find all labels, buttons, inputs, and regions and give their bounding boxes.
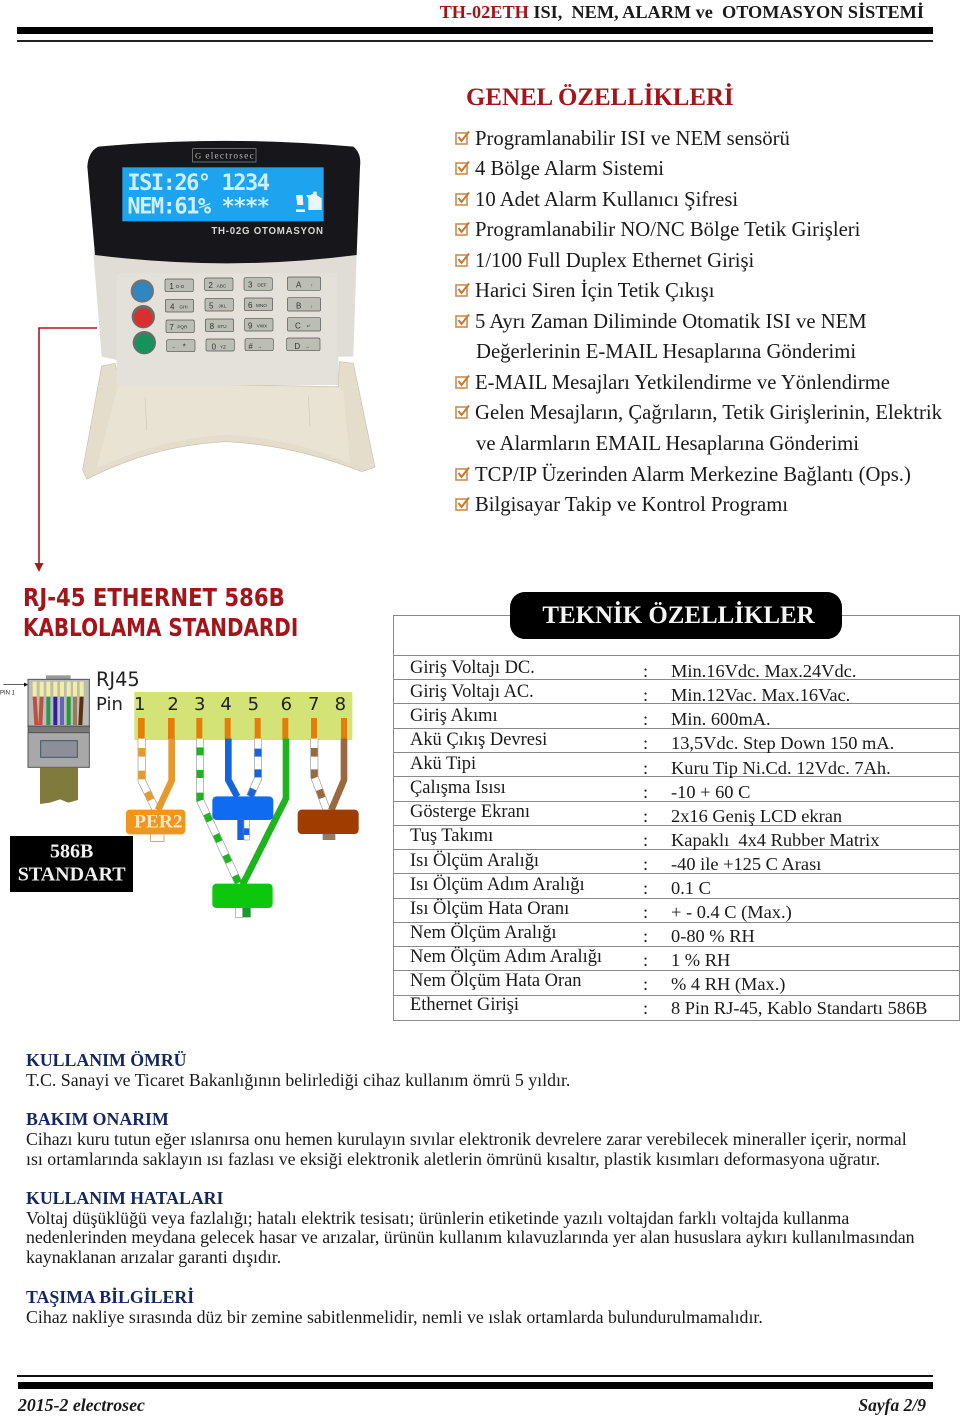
wiring diagram (0, 668, 359, 918)
rj45 pin labels: 7 (308, 694, 319, 715)
feature 7 (455, 311, 867, 363)
spec table text: Giriş Voltajı DC. (410, 657, 535, 677)
rj45 pin labels: 3 (194, 694, 205, 715)
table row lines (394, 655, 959, 996)
section: taşıma bilgileri: TAŞIMA BİLGİLERİ (26, 1287, 194, 1307)
spec table text: 1 % RH (671, 950, 730, 970)
spec table text: 0.1 C (671, 878, 711, 898)
feature 8: E-MAIL Mesajları Yetkilendirme ve Yönlendirme (475, 372, 890, 394)
keypad keys (165, 277, 321, 352)
feature 3: 10 Adet Alarm Kullanıcı Şifresi (475, 189, 738, 211)
spec table text: Isı Ölçüm Adım Aralığı (410, 874, 585, 894)
rj45 pin labels (96, 668, 346, 715)
rj45 pin labels: 2 (167, 694, 179, 715)
feature 2: 4 Bölge Alarm Sistemi (475, 158, 664, 180)
keypad keys: DEF (257, 283, 267, 288)
keypad keys: 6 (248, 301, 253, 310)
header title: TH-02ETH ISI, NEM, ALARM ve OTOMASYON SİSTEMİ (440, 2, 924, 22)
keypad device photo (82, 140, 376, 480)
orange pair connector: PER2 (134, 812, 182, 833)
blue pair (228, 739, 258, 840)
spec table text: : (643, 685, 648, 705)
keypad keys: 2 (208, 281, 213, 290)
spec table text: 2x16 Geniş LCD ekran (671, 806, 842, 826)
spec table text: Giriş Akımı (410, 705, 498, 725)
feature 11: Bilgisayar Takip ve Kontrol Programı (475, 494, 788, 516)
features heading: GENEL ÖZELLİKLERİ (466, 84, 734, 111)
orange pair connector (126, 810, 185, 841)
spec table text: % 4 RH (Max.) (671, 974, 785, 994)
spec table text: Min.12Vac. Max.16Vac. (671, 685, 850, 705)
spec table text: Nem Ölçüm Hata Oran (410, 970, 582, 990)
spec table text: Ethernet Girişi (410, 994, 519, 1014)
section: bakım onarım (26, 1109, 907, 1169)
keypad keys: PQR (177, 325, 188, 330)
rj-45 heading: KABLOLAMA STANDARDI (23, 612, 298, 642)
section: kullanım hataları: nedenlerinden meydana gelecek hasar ve arızalar, ürünün kullanım kılavuzlarında yer alan hususlara aykırı kullanılmasından (26, 1227, 915, 1247)
spec table text: : (643, 998, 648, 1018)
keypad keys: ↵ (307, 323, 311, 328)
section: bakım onarım: Cihazı kuru tutun eğer ıslanırsa onu hemen kurulayın sıvılar elektronik devrelere zarar verebilecek mineraller içerir, normal (26, 1129, 907, 1149)
lcd display (122, 167, 324, 221)
section: kullanım hataları (26, 1188, 915, 1267)
spec table text (410, 657, 927, 1018)
spec table text: + - 0.4 C (Max.) (671, 902, 792, 922)
feature 10: TCP/IP Üzerinden Alarm Merkezine Bağlantı (Ops.) (475, 464, 911, 486)
keypad keys: O-D (176, 284, 185, 289)
brown pair (314, 739, 344, 840)
section: kullanım hataları: KULLANIM HATALARI (26, 1188, 223, 1208)
keypad keys: # (248, 342, 253, 351)
header rule thin (17, 40, 933, 42)
spec table text: : (643, 974, 648, 994)
keypad keys: 4 (170, 302, 175, 311)
orange pair (142, 739, 172, 810)
feature 6: Harici Siren İçin Tetik Çıkışı (475, 280, 714, 302)
section: kullanım ömrü (26, 1050, 570, 1090)
rj45 pin labels: 8 (335, 694, 346, 715)
blue pair connector (212, 796, 273, 820)
spec table text: Min.16Vdc. Max.24Vdc. (671, 661, 856, 681)
keypad keys: * (183, 342, 186, 351)
feature 7: 5 Ayrı Zaman Diliminde Otomatik ISI ve NEM (475, 311, 867, 333)
rj45 pin labels: RJ45 (96, 668, 140, 691)
keypad keys: STU (217, 324, 227, 329)
spec table text: : (643, 950, 648, 970)
pin band (134, 692, 352, 740)
spec table text: Çalışma Isısı (410, 777, 506, 797)
brand label: G (195, 151, 201, 161)
spec table text: : (643, 854, 648, 874)
header rule thick (17, 27, 933, 34)
keypad keys: YZ (220, 344, 226, 349)
feature 5: 1/100 Full Duplex Ethernet Girişi (475, 250, 754, 272)
rj45 plug (0, 675, 89, 804)
spec table text: 0-80 % RH (671, 926, 755, 946)
keypad keys: → (305, 344, 310, 349)
keypad keys: 8 (210, 322, 215, 331)
section: taşıma bilgileri (26, 1287, 763, 1327)
keypad keys: 9 (248, 322, 253, 331)
rj-45 heading (23, 583, 298, 642)
technical heading pill (510, 592, 842, 639)
section: kullanım hataları: kaynaklanan arızalar garanti dışıdır. (26, 1247, 281, 1267)
keypad keys: JKL (218, 304, 227, 309)
keypad keys: → (257, 344, 262, 349)
brand label (193, 149, 256, 162)
green pair (200, 739, 286, 917)
keypad keys: B (296, 301, 301, 310)
keypad keys: C (295, 321, 301, 330)
technical specifications panel (393, 592, 960, 1021)
spec table text: Akü Çıkış Devresi (410, 729, 547, 749)
keypad keys: 0 (212, 342, 217, 351)
table frame (393, 615, 960, 1021)
feature 9: Gelen Mesajların, Çağrıların, Tetik Girişlerinin, Elektrik (475, 402, 942, 424)
keypad keys: MNO (256, 303, 267, 308)
footer page number: Sayfa 2/9 (858, 1395, 926, 1415)
keypad keys: 7 (169, 323, 174, 332)
spec table text: Min. 600mA. (671, 709, 771, 729)
feature 1: Programlanabilir ISI ve NEM sensörü (475, 128, 790, 150)
spec table text: Kapaklı 4x4 Rubber Matrix (671, 830, 879, 850)
rj45 pin labels: 6 (281, 694, 292, 715)
black bezel (87, 141, 360, 263)
footer rule thick (18, 1382, 933, 1389)
keypad keys: 3 (248, 281, 253, 290)
spec table text: : (643, 806, 648, 826)
spec table text: : (643, 661, 648, 681)
586b standard label: STANDART (18, 863, 126, 885)
spec table text: -10 + 60 C (671, 782, 750, 802)
keypad lid (83, 362, 375, 479)
spec table text: : (643, 709, 648, 729)
section: bakım onarım: ısı ortamlarında saklayın ısı fazlası ve eksiği elektronik aletlerin ömrünü kısaltır, plastik kısımları deformasyona uğratır. (26, 1149, 880, 1169)
section: bakım onarım: BAKIM ONARIM (26, 1109, 169, 1129)
feature 9 (455, 402, 942, 455)
feature 7: Değerlerinin E-MAIL Hesaplarına Gönderimi (476, 341, 856, 363)
keypad keys: A (296, 281, 302, 290)
model label: TH-02G OTOMASYON (211, 226, 323, 237)
lcd display: ISI:26° 1234 (127, 171, 270, 196)
spec table text: : (643, 830, 648, 850)
keypad keys: VWX (257, 323, 268, 328)
rj45 pin labels: 5 (248, 694, 259, 715)
section: kullanım hataları: Voltaj düşüklüğü veya fazlalığı; hatalı elektrik tesisatı; ürünlerin etiketinde yazılı voltajdan farklı voltajda kullanma (26, 1208, 849, 1228)
spec table text: : (643, 926, 648, 946)
keypad keys: ↓ (310, 303, 312, 308)
spec table text: Gösterge Ekranı (410, 801, 530, 821)
keypad keys: 1 (169, 282, 174, 291)
keypad keys: ↑ (311, 283, 313, 288)
features list (455, 128, 942, 516)
spec table text: : (643, 758, 648, 778)
spec table text: : (643, 782, 648, 802)
status leds (131, 279, 156, 354)
page header (17, 2, 933, 42)
spec table text: Isı Ölçüm Aralığı (410, 850, 539, 870)
spec table text: Nem Ölçüm Aralığı (410, 922, 556, 942)
feature 4: Programlanabilir NO/NC Bölge Tetik Girişleri (475, 219, 860, 241)
section: kullanım ömrü: T.C. Sanayi ve Ticaret Bakanlığının belirlediği cihaz kullanım ömrü 5 yıldır. (26, 1070, 570, 1090)
spec table text: 8 Pin RJ-45, Kablo Standartı 586B (671, 998, 927, 1018)
technical heading pill: TEKNİK ÖZELLİKLER (542, 602, 815, 629)
spec table text: : (643, 733, 648, 753)
spec table text: Akü Tipi (410, 753, 476, 773)
586b standard label: 586B (50, 840, 93, 862)
brown pair connector (298, 810, 359, 834)
keypad keys: ← (172, 344, 176, 349)
keypad keys: ABC (217, 283, 227, 288)
keypad keys: GHI (179, 304, 188, 309)
feature 9: ve Alarmların EMAIL Hesaplarına Gönderimi (476, 433, 859, 455)
keypad body (93, 253, 357, 385)
spec table text: : (643, 902, 648, 922)
rj45 plug: PIN 1 (0, 691, 16, 697)
spec table text: -40 ile +125 C Arası (671, 854, 821, 874)
spec table text: 13,5Vdc. Step Down 150 mA. (671, 733, 894, 753)
spec table text: Giriş Voltajı AC. (410, 681, 534, 701)
footer left text: 2015-2 electrosec (18, 1395, 145, 1415)
section: taşıma bilgileri: Cihaz nakliye sırasında düz bir zemine sabitlenmelidir, nemli ve ıslak ortamlarda bulundurulmamalıdır. (26, 1307, 763, 1327)
spec table text: : (643, 878, 648, 898)
spec table text: Isı Ölçüm Hata Oranı (410, 898, 569, 918)
rj45 pin labels: 4 (220, 694, 232, 715)
rj45 pin labels: 1 (134, 694, 145, 715)
green pair connector (212, 884, 273, 908)
spec table text: Tuş Takımı (410, 825, 493, 845)
spec table text: Kuru Tip Ni.Cd. 12Vdc. 7Ah. (671, 758, 891, 778)
keypad keys: 5 (209, 301, 214, 310)
rj-45 heading: RJ-45 ETHERNET 586B (23, 583, 285, 612)
keypad keys: D (294, 342, 300, 351)
lcd display: NEM:61% **** (127, 194, 270, 219)
brand label: electrosec (205, 152, 254, 162)
spec table text: Nem Ölçüm Adım Aralığı (410, 946, 602, 966)
footer rule thin (17, 1375, 933, 1377)
pin contacts (138, 718, 347, 739)
586b standard label (10, 836, 133, 892)
icon: red connector arrow (34, 327, 97, 572)
page footer (17, 1375, 933, 1415)
rj45 pin labels: Pin (96, 694, 123, 715)
section: kullanım ömrü: KULLANIM ÖMRÜ (26, 1050, 187, 1070)
